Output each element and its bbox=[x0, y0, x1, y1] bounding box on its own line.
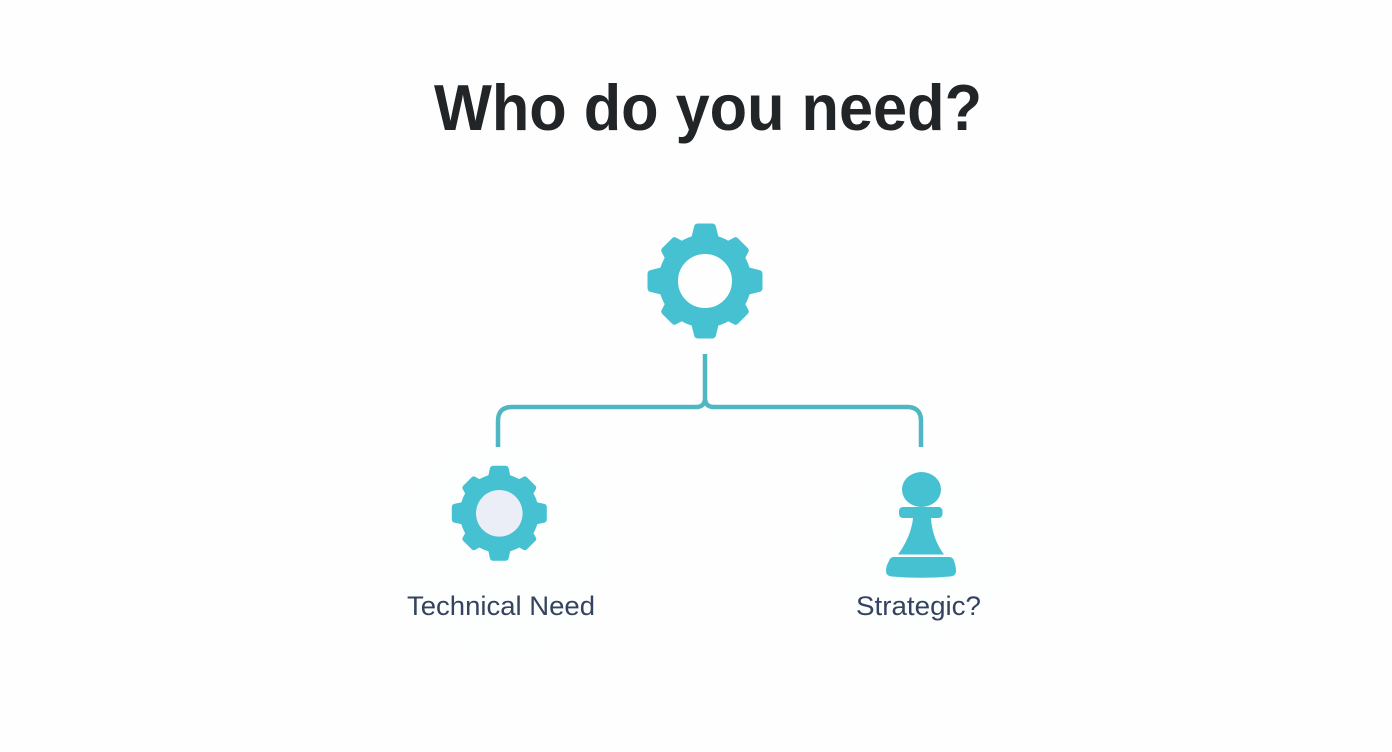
label: strategic: Strategic? bbox=[856, 591, 981, 621]
icon: technical need gear bbox=[452, 466, 547, 561]
icon: top gear bbox=[648, 224, 762, 338]
title: Who do you need? bbox=[434, 71, 982, 144]
icon: strategic chess pawn bbox=[886, 472, 956, 578]
connector: branching line bbox=[498, 354, 921, 447]
label: technical need: Technical Need bbox=[407, 591, 595, 621]
